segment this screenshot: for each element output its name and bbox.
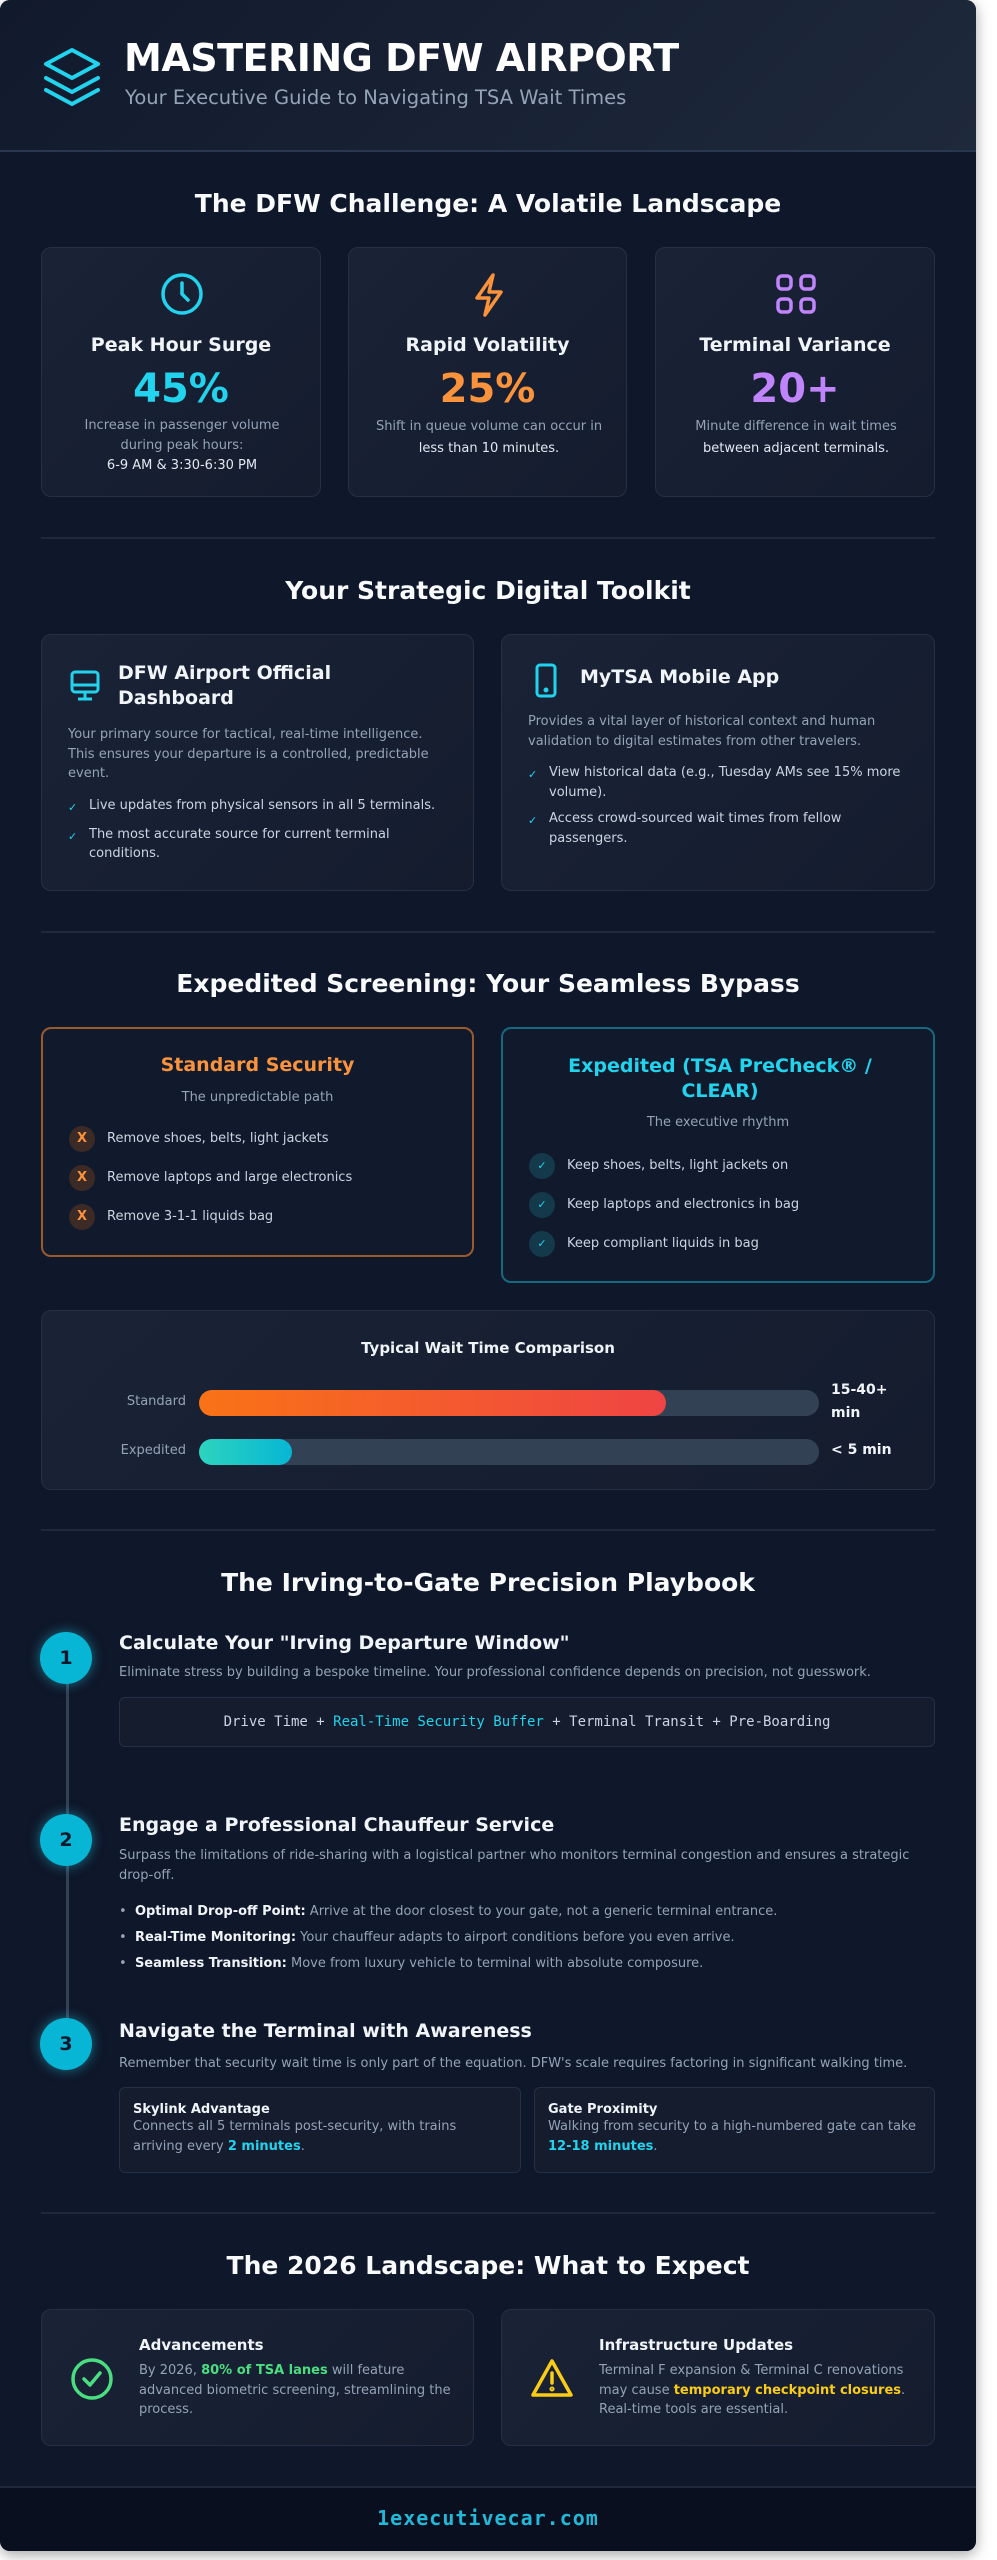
stat card: peak hour (41, 247, 321, 497)
panel: standard security (41, 1027, 474, 1257)
footer (0, 2486, 976, 2551)
panel: expedited: Expedited (TSA PreCheck® / CLEAR) (568, 1055, 872, 1102)
panel: expedited: Keep shoes, belts, light jackets on (567, 1158, 788, 1173)
stat card: terminal variance (655, 247, 935, 497)
stat card: peak hour: 45% (133, 366, 229, 412)
step 2: • Seamless Transition: Move from luxury vehicle to terminal with absolute composure. (119, 1956, 703, 1971)
panel: mytsa: ✓ (528, 814, 537, 827)
step 2: Engage a Professional Chauffeur Service (119, 1814, 554, 1836)
step 3: 3 (59, 2033, 73, 2055)
icon: monitor (70, 670, 100, 700)
section title: playbook: The Irving-to-Gate Precision Playbook (221, 1568, 755, 1597)
panel: dashboard (41, 634, 474, 891)
stat card: volatility: Rapid Volatility (406, 334, 569, 356)
step 3: Remember that security wait time is only part of the equation. DFW's scale requires factoring in significant walking time. (119, 2056, 907, 2071)
panel: standard security: Standard Security (161, 1054, 354, 1076)
panel: advancements (41, 2309, 474, 2446)
chart: wait time comparison: 15-40+ min (831, 1382, 888, 1421)
stat card: volatility: Shift in queue volume can occur in less than 10 minutes. (376, 419, 602, 456)
panel: expedited: ✓ (537, 1159, 547, 1172)
step 1: Calculate Your "Irving Departure Window" (119, 1632, 570, 1654)
panel: dashboard: Your primary source for tactical, real-time intelligence. This ensures your departure is a controlled, predictable event. (68, 727, 429, 781)
section title: 2026: The 2026 Landscape: What to Expect (227, 2251, 749, 2280)
box: skylink: Skylink Advantage (133, 2102, 270, 2117)
panel: standard security: The unpredictable path (182, 1090, 333, 1105)
icon: check circle (71, 2358, 113, 2400)
section title: toolkit: Your Strategic Digital Toolkit (285, 576, 691, 605)
step 1: Eliminate stress by building a bespoke timeline. Your professional confidence depends on precision, not guesswork. (119, 1665, 871, 1680)
step 2: Surpass the limitations of ride-sharing with a logistical partner who monitors terminal congestion and ensures a strategic drop-off. (119, 1848, 909, 1883)
box: skylink (119, 2087, 521, 2173)
panel: dashboard: Live updates from physical sensors in all 5 terminals. (89, 798, 435, 813)
panel: infrastructure: Infrastructure Updates (599, 2336, 793, 2354)
subtitle: Your Executive Guide to Navigating TSA Wait Times (125, 86, 626, 109)
stat card: peak hour: Increase in passenger volume during peak hours: (84, 418, 280, 453)
step 2: • Real-Time Monitoring: Your chauffeur adapts to airport conditions before you even arrive. (119, 1930, 735, 1945)
step 2: 2 (59, 1829, 73, 1851)
panel: standard security: Remove shoes, belts, light jackets (107, 1131, 328, 1146)
title: MASTERING DFW AIRPORT (124, 36, 679, 80)
panel: mytsa: MyTSA Mobile App (580, 666, 779, 688)
panel: standard security: X (77, 1170, 87, 1185)
chart: wait time comparison: Typical Wait Time Comparison (361, 1339, 615, 1357)
panel: standard security: Remove laptops and large electronics (107, 1170, 352, 1185)
step 3 (32, 2010, 935, 2173)
panel: standard security: X (77, 1131, 87, 1146)
section title: screening: Expedited Screening: Your Seamless Bypass (176, 969, 800, 998)
icon: phone (536, 664, 556, 698)
stat card: terminal variance: 20+ (750, 366, 840, 412)
step 2 (32, 1806, 909, 1971)
step 2: • Optimal Drop-off Point: Arrive at the door closest to your gate, not a generic terminal entrance. (119, 1904, 777, 1919)
step 1: 1 (59, 1647, 73, 1669)
panel: dashboard: The most accurate source for current terminal conditions. (89, 826, 390, 861)
icon: clock (161, 273, 203, 315)
panel: advancements: By 2026, 80% of TSA lanes will feature advanced biometric screening, streamlining the process. (139, 2363, 451, 2417)
step 1 (32, 1624, 935, 1747)
box: gate proximity: Walking from security to a high-numbered gate can take 12-18 minutes. (548, 2119, 916, 2154)
box: skylink: Connects all 5 terminals post-security, with trains arriving every 2 minutes. (133, 2119, 456, 2154)
stat card: terminal variance: Terminal Variance (699, 334, 891, 356)
step 3: Navigate the Terminal with Awareness (119, 2020, 532, 2042)
panel: mytsa: ✓ (528, 768, 537, 781)
chart: wait time comparison: < 5 min (831, 1442, 892, 1458)
panel: expedited: Keep compliant liquids in bag (567, 1236, 759, 1251)
box: gate proximity (534, 2087, 935, 2173)
panel: mytsa (501, 634, 935, 891)
section title: challenge: The DFW Challenge: A Volatile Landscape (195, 189, 781, 218)
stat card: volatility (348, 247, 627, 497)
icon: layers (44, 48, 100, 106)
panel: dashboard: ✓ (68, 801, 77, 814)
panel: expedited: ✓ (537, 1237, 547, 1250)
panel: dashboard: DFW Airport Official Dashboard (118, 662, 331, 709)
panel: infrastructure (501, 2309, 935, 2446)
chart: wait time comparison (41, 1310, 935, 1490)
stat card: terminal variance: Minute difference in wait times between adjacent terminals. (695, 419, 897, 456)
panel: standard security: X (77, 1209, 87, 1224)
chart: wait time comparison: Expedited (121, 1443, 186, 1458)
panel: mytsa: Provides a vital layer of historical context and human validation to digital estimates from other travelers. (528, 714, 875, 748)
icon: lightning (475, 273, 503, 317)
step 1: Drive Time + Real-Time Security Buffer + Terminal Transit + Pre-Boarding (224, 1714, 830, 1730)
panel: mytsa: Access crowd-sourced wait times from fellow passengers. (549, 811, 841, 846)
panel: expedited: Keep laptops and electronics in bag (567, 1197, 799, 1212)
box: gate proximity: Gate Proximity (548, 2102, 657, 2117)
panel: advancements: Advancements (139, 2336, 264, 2354)
stat card: volatility: 25% (440, 366, 535, 412)
icon: warning (531, 2359, 573, 2397)
panel: dashboard: ✓ (68, 830, 77, 842)
panel: mytsa: View historical data (e.g., Tuesday AMs see 15% more volume). (549, 765, 900, 800)
header (0, 0, 976, 152)
stat card: peak hour: Peak Hour Surge (91, 334, 271, 356)
panel: infrastructure: Terminal F expansion & Terminal C renovations may cause temporary checkpoint closures. Real-time tools are essential. (599, 2363, 905, 2417)
chart: wait time comparison: Standard (127, 1394, 186, 1409)
stat card: peak hour: 6-9 AM & 3:30-6:30 PM (107, 458, 257, 473)
panel: standard security: Remove 3-1-1 liquids bag (107, 1209, 273, 1224)
panel: expedited: ✓ (537, 1198, 547, 1211)
panel: expedited (501, 1027, 935, 1283)
timeline line (66, 1660, 69, 2045)
footer: 1executivecar.com (377, 2506, 599, 2530)
icon: grid (776, 274, 816, 314)
panel: expedited: The executive rhythm (647, 1115, 789, 1130)
